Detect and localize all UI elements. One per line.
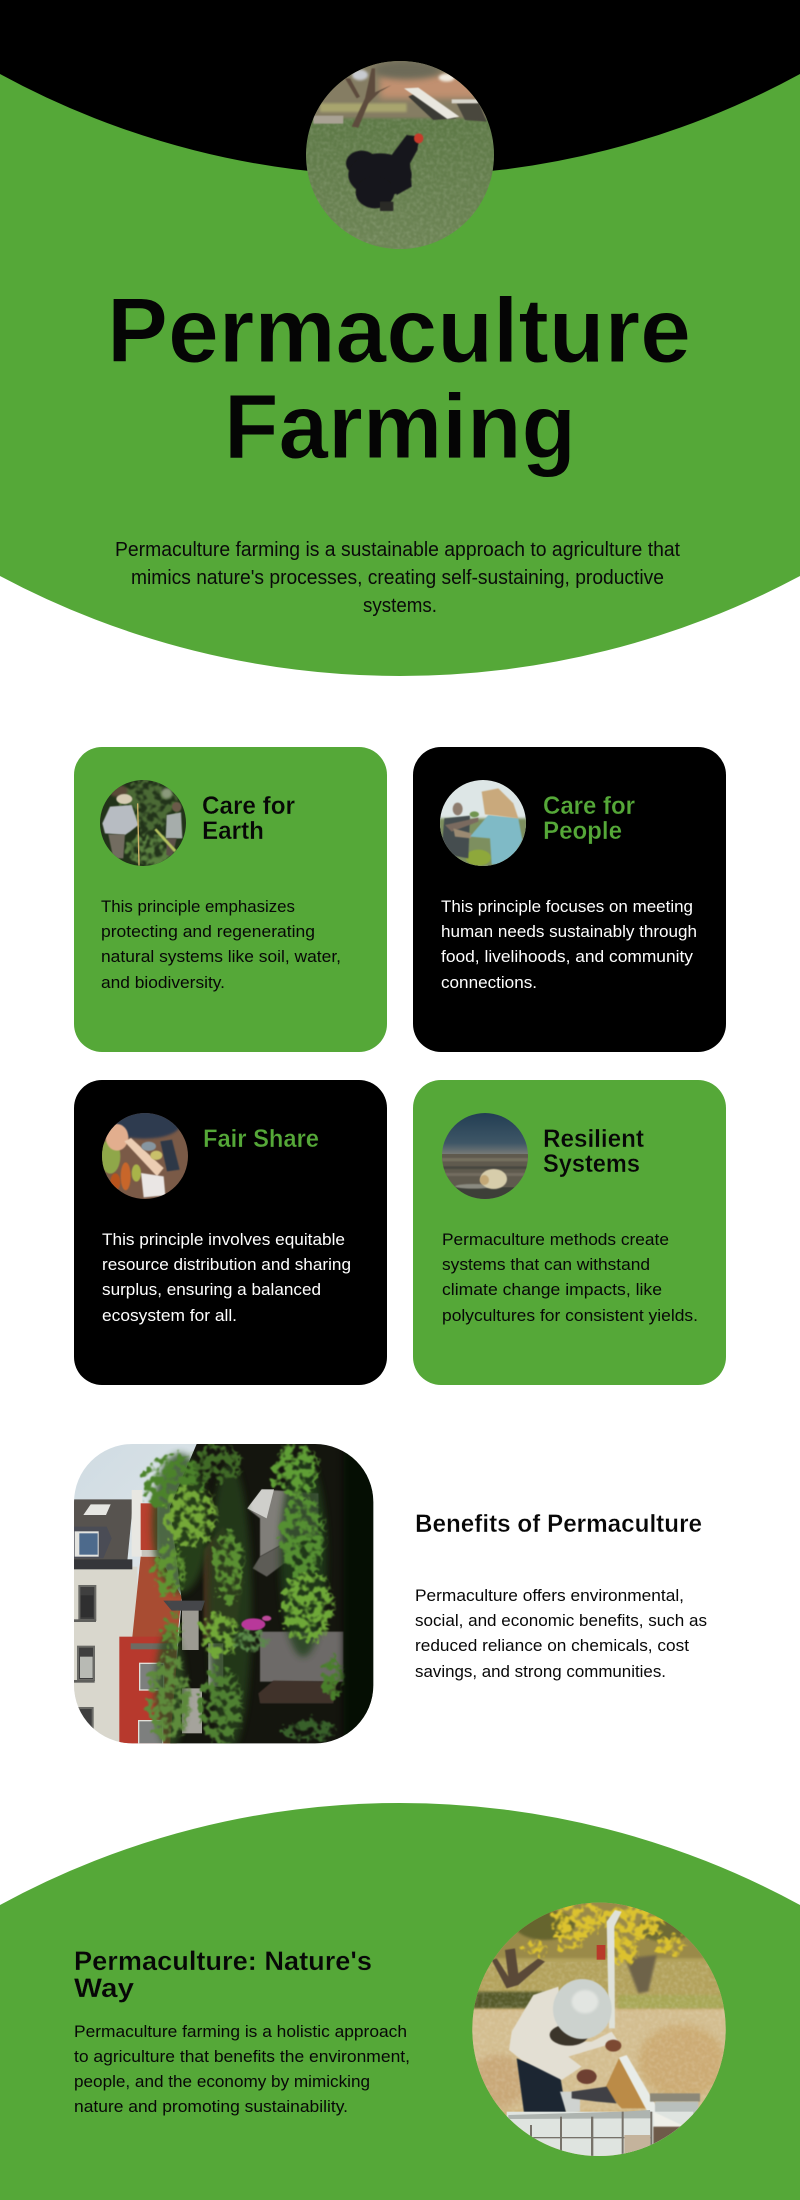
footer heading: Permaculture: Nature's [74,1946,372,1976]
intro paragraph: systems. [363,595,437,617]
heading [543,1125,645,1178]
body text [102,1230,351,1325]
body text: polycultures for consistent yields. [442,1306,698,1325]
body text [101,897,341,992]
benefits body text [415,1586,707,1681]
footer body text: to agriculture that benefits the environment, [74,2047,410,2066]
footer body text: nature and promoting sustainability. [74,2097,348,2116]
title: Farming [224,376,576,478]
heading: People [543,817,622,845]
photo: polar bear on tundra [442,1113,528,1199]
heading: Earth [202,817,264,845]
heading [543,792,635,845]
footer green arch panel [0,1803,800,2200]
panel: Care for People [413,747,726,1052]
body text: This principle focuses on meeting [441,897,693,916]
panel: Resilient Systems [413,1080,726,1385]
body text [441,897,697,992]
hen [346,135,419,211]
benefits heading: Benefits of Permaculture [415,1510,702,1538]
heading: Systems [543,1150,640,1178]
title: Permaculture [107,280,691,382]
benefits body text: reduced reliance on chemicals, cost [415,1636,689,1655]
intro paragraph [115,539,680,617]
photo: apartment building covered in vines [70,1440,380,1750]
intro paragraph: Permaculture farming is a sustainable approach to agriculture that [115,539,680,561]
panel: Fair Share [74,1080,387,1385]
body text: resource distribution and sharing [102,1255,351,1274]
benefits body text: Permaculture offers environmental, [415,1586,684,1605]
body text: natural systems like soil, water, [101,947,341,966]
heading: Fair Share [203,1125,319,1153]
heading: Care for [543,792,635,820]
heading: Care for [202,792,295,820]
footer body text: Permaculture farming is a holistic approach [74,2022,407,2041]
body text: systems that can withstand [442,1255,650,1274]
body text: and biodiversity. [101,973,225,992]
photo: black hen on grass [306,61,494,249]
title [107,280,691,478]
body text: This principle emphasizes [101,897,295,916]
vine shadow mass [152,1453,327,1750]
body text: This principle involves equitable [102,1230,345,1249]
footer body text [74,2022,410,2116]
benefits body text: social, and economic benefits, such as [415,1611,707,1630]
photo: two farmers among trees [100,780,186,866]
body text: connections. [441,973,537,992]
body text: climate change impacts, like [442,1280,662,1299]
vines [143,1442,345,1747]
body text [442,1230,698,1325]
body text: food, livelihoods, and community [441,947,694,966]
footer heading: Way [74,1973,134,2003]
footer heading [74,1946,372,2003]
body text: Permaculture methods create [442,1230,669,1249]
body text: surplus, ensuring a balanced [102,1280,321,1299]
heading: Resilient [543,1125,645,1153]
footer body text: people, and the economy by mimicking [74,2072,370,2091]
body text: human needs sustainably through [441,922,697,941]
panel: Care for Earth [74,747,387,1052]
header green arch panel [0,74,800,676]
body text: ecosystem for all. [102,1306,237,1325]
benefits body text: savings, and strong communities. [415,1662,666,1681]
balconies [247,1489,318,1557]
intro paragraph: mimics nature's processes, creating self-sustaining, productive [131,567,664,589]
heading [202,792,295,845]
body text: protecting and regenerating [101,922,315,941]
photo: hands sharing food [102,1113,188,1199]
photo: beekeeper tending hives [472,1902,726,2156]
photo: two people talking in a garden [440,780,526,866]
header black band [0,0,800,190]
